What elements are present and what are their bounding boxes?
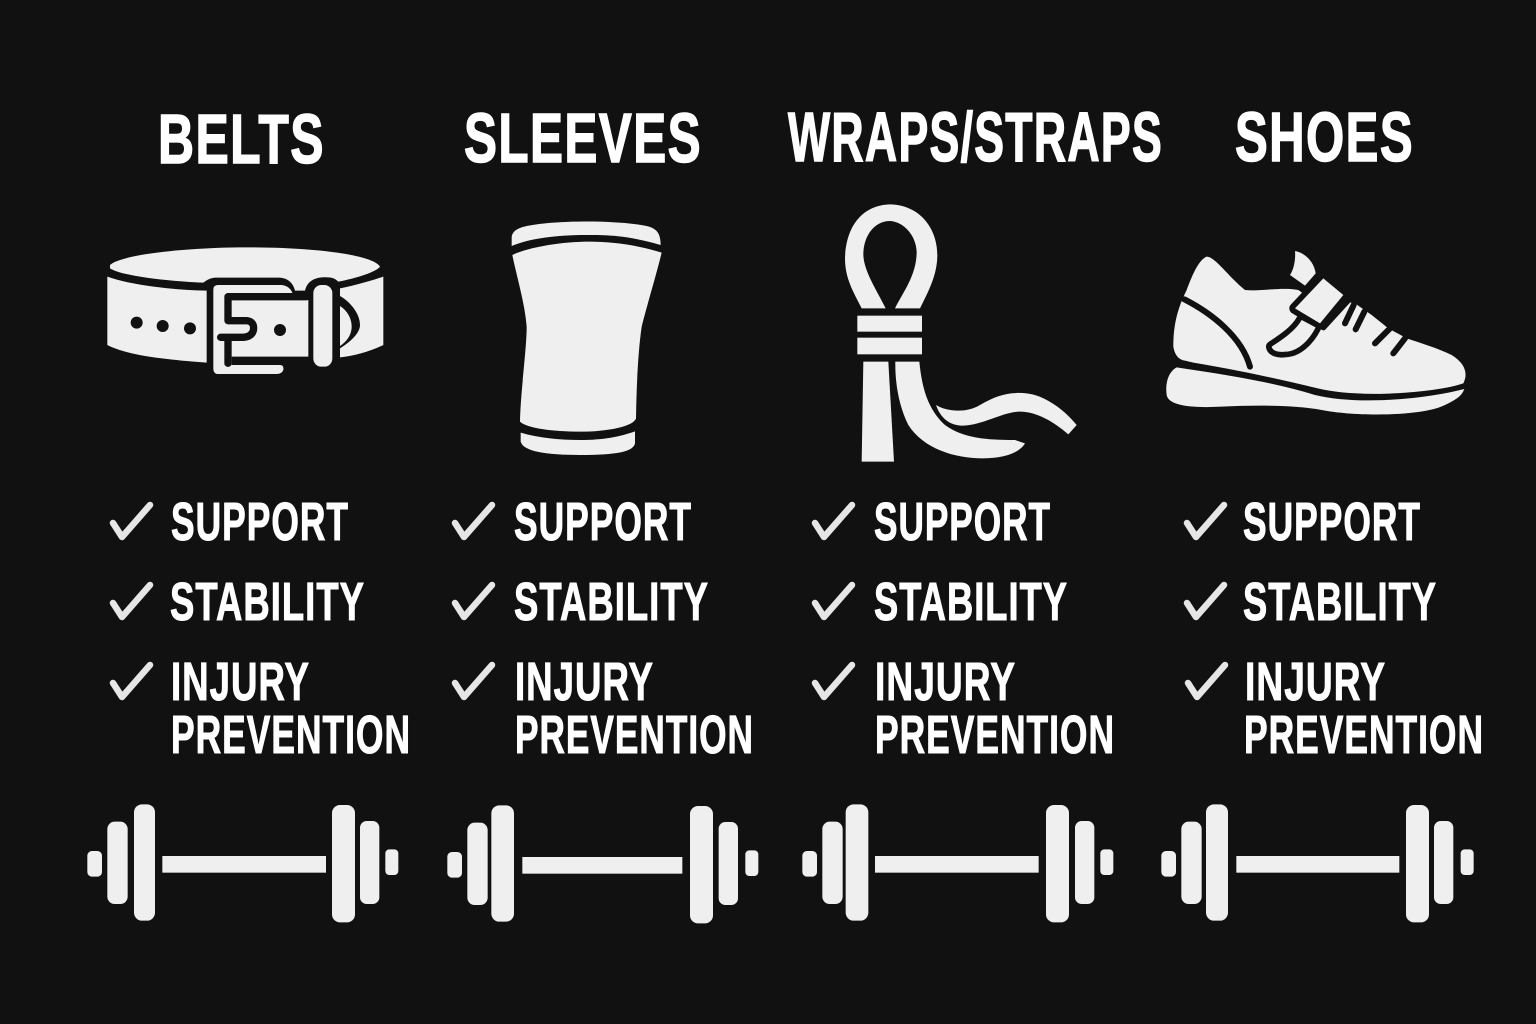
- icon: barbell: [87, 804, 398, 922]
- checklist: shoes: SUPPORT: [1243, 492, 1421, 552]
- icon: barbell: [1161, 804, 1474, 922]
- checklist: wraps and straps: PREVENTION: [875, 705, 1115, 765]
- icon: lifting strap: [845, 204, 1077, 462]
- checklist: sleeves: STABILITY: [514, 572, 709, 632]
- checklist: sleeves: [455, 492, 754, 765]
- checklist: shoes: STABILITY: [1243, 572, 1437, 632]
- panel: shoes: [1161, 98, 1484, 922]
- heading: belts: BELTS: [158, 100, 325, 178]
- panel: sleeves: [447, 99, 758, 923]
- checklist: belts: STABILITY: [170, 572, 365, 632]
- icon: knee sleeve: [512, 221, 662, 455]
- checklist: sleeves: INJURY: [515, 652, 654, 712]
- checklist: sleeves: PREVENTION: [515, 705, 754, 765]
- checklist: belts: SUPPORT: [171, 492, 349, 552]
- checklist: shoes: INJURY: [1245, 652, 1386, 712]
- heading: sleeves: SLEEVES: [464, 99, 702, 177]
- checklist: wraps and straps: SUPPORT: [874, 492, 1051, 552]
- icon: barbell: [447, 805, 758, 923]
- checklist: wraps and straps: INJURY: [875, 652, 1016, 712]
- icon: belt: [107, 247, 383, 374]
- icon: lifting shoe: [1166, 251, 1466, 415]
- checklist: shoes: [1187, 492, 1484, 765]
- checklist: belts: INJURY: [171, 652, 310, 712]
- checklist: belts: PREVENTION: [171, 705, 411, 765]
- icon: barbell: [802, 804, 1113, 922]
- panel: wraps and straps: [788, 98, 1163, 922]
- checklist: wraps and straps: STABILITY: [874, 572, 1068, 632]
- panel: belts: [87, 100, 411, 922]
- checklist: belts: [113, 492, 411, 765]
- checklist: sleeves: SUPPORT: [514, 492, 692, 552]
- checklist: wraps and straps: [815, 492, 1115, 765]
- heading: wraps/straps: WRAPS/STRAPS: [788, 98, 1163, 176]
- heading: shoes: SHOES: [1235, 98, 1414, 176]
